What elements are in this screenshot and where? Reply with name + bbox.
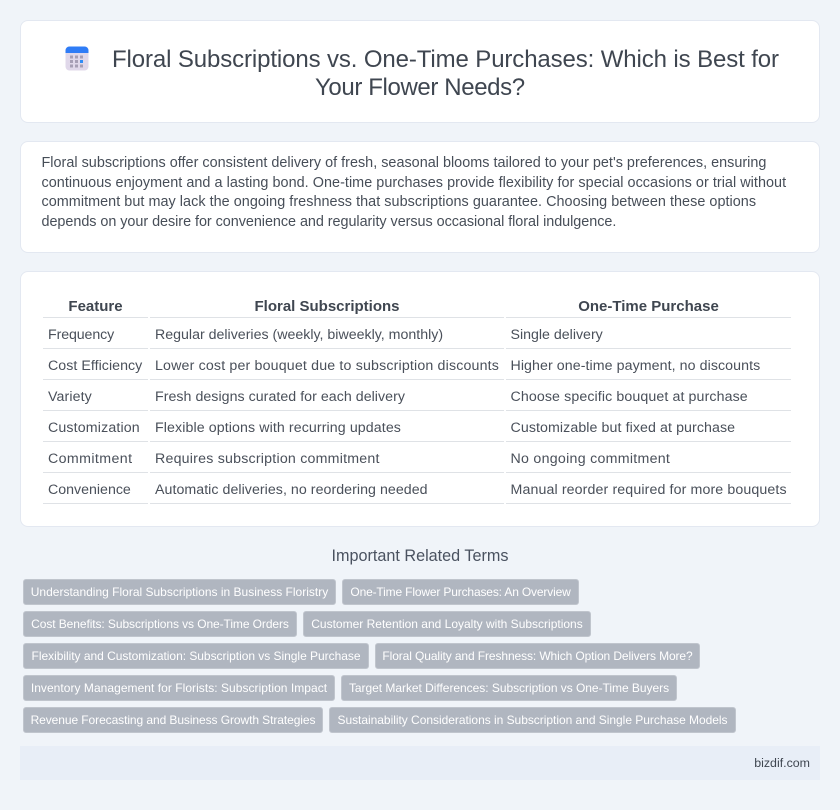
tags: related terms: Revenue Forecasting and Business Growth Strategies: [31, 713, 315, 727]
tags: related terms: Target Market Differences: Subscription vs One-Time Buyers: [349, 681, 669, 695]
row: convenience: Manual reorder required for more bouquets: [510, 482, 787, 498]
row: variety: Fresh designs curated for each delivery: [155, 389, 405, 405]
row: convenience: Automatic deliveries, no reordering needed: [155, 482, 428, 498]
tags: related terms: Inventory Management for Florists: Subscription Impact: [31, 681, 327, 695]
summary text: depends on your desire for convenience and regularity versus occasional floral indulgence.: [42, 214, 616, 230]
footer text: bizdif.com: [754, 756, 810, 770]
row: customization: Customizable but fixed at purchase: [510, 420, 735, 436]
summary text: Floral subscriptions offer consistent delivery of fresh, seasonal blooms tailored to your pet's preferences, ensuring: [42, 155, 766, 171]
row: cost efficiency: Higher one-time payment, no discounts: [510, 358, 760, 374]
row: commitment: No ongoing commitment: [510, 451, 670, 467]
summary text: continuous enjoyment and a lasting bond. One-time purchases provide flexibility for special occasions or trial without: [42, 175, 786, 191]
tags: related terms: Flexibility and Customization: Subscription vs Single Purchase: [32, 649, 360, 663]
row: commitment: Commitment: [48, 451, 132, 467]
icon: calendar: [66, 46, 88, 70]
footer: [20, 746, 820, 780]
row: customization: Flexible options with recurring updates: [155, 420, 401, 436]
panel: summary paragraph: [20, 141, 820, 253]
row: customization: [48, 420, 735, 436]
row: variety: [48, 389, 748, 405]
row: frequency: Frequency: [48, 327, 114, 343]
row: convenience: [48, 482, 787, 498]
tags: related terms: Customer Retention and Loyalty with Subscriptions: [311, 617, 583, 631]
row: commitment: [48, 451, 670, 467]
row: frequency: [48, 327, 603, 343]
title: [112, 46, 779, 101]
tags: related terms: One-Time Flower Purchases: An Overview: [350, 585, 571, 599]
title: Your Flower Needs?: [315, 74, 525, 101]
table header: One-Time Purchase: [578, 298, 719, 315]
tags: related terms: Understanding Floral Subscriptions in Business Floristry: [31, 585, 328, 599]
table header: [68, 298, 719, 315]
row: commitment: Requires subscription commitment: [155, 451, 380, 467]
row: frequency: Regular deliveries (weekly, biweekly, monthly): [155, 327, 443, 343]
row: variety: Choose specific bouquet at purchase: [510, 389, 748, 405]
panel: comparison table: [20, 271, 820, 527]
tags: related terms: Cost Benefits: Subscriptions vs One-Time Orders: [31, 617, 289, 631]
row: customization: Customization: [48, 420, 140, 436]
summary text: [42, 155, 786, 230]
header card: [20, 20, 820, 123]
row: variety: Variety: [48, 389, 92, 405]
row: frequency: Single delivery: [510, 327, 603, 343]
heading: related terms: Important Related Terms: [332, 547, 508, 565]
row: cost efficiency: [48, 358, 760, 374]
row: convenience: Convenience: [48, 482, 131, 498]
table header: Feature: [68, 298, 123, 315]
row: cost efficiency: Lower cost per bouquet due to subscription discounts: [155, 358, 499, 374]
tags: related terms: Floral Quality and Freshness: Which Option Delivers More?: [382, 649, 693, 663]
tags: related terms: [23, 579, 736, 733]
row: cost efficiency: Cost Efficiency: [48, 358, 142, 374]
tags: related terms: Sustainability Considerations in Subscription and Single Purchase Models: [337, 713, 728, 727]
summary text: commitment but may lack the ongoing freshness that subscriptions guarantee. Choosing between these options: [42, 194, 756, 210]
title: Floral Subscriptions vs. One-Time Purchases: Which is Best for: [112, 46, 779, 73]
table header: Floral Subscriptions: [254, 298, 400, 315]
